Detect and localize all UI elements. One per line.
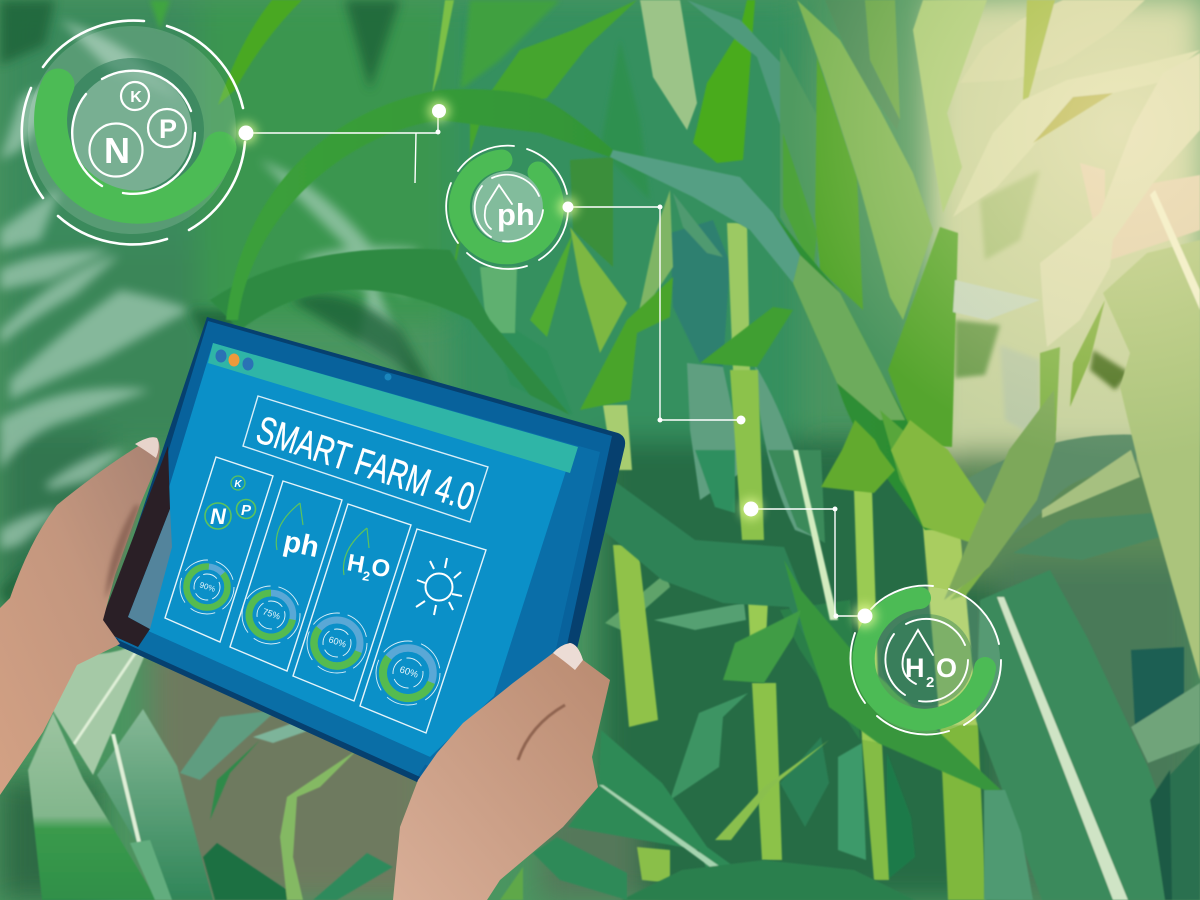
callout: H2O sensor: 2 <box>926 674 934 691</box>
screen <box>128 343 572 757</box>
panel: NPK: P <box>241 502 252 519</box>
leaf: lower right large leaf <box>976 570 1200 900</box>
green arc <box>459 160 553 254</box>
panel: NPK: K <box>234 479 242 490</box>
panel: H2O <box>293 504 411 701</box>
title box <box>243 396 488 522</box>
leaf: H2O lower leaf <box>603 450 1001 792</box>
camera <box>384 374 392 380</box>
leaves: middle background <box>480 0 1160 880</box>
stems: corn stalks <box>603 223 986 900</box>
gauge: 60%: 60% <box>398 664 420 681</box>
callout: NPK sensor <box>22 21 245 244</box>
callout: NPK sensor: N <box>104 130 130 171</box>
gauge: 90% <box>178 558 236 616</box>
tablet body <box>103 317 625 835</box>
gauge: 60% <box>375 640 441 706</box>
leaves: lower left corn <box>28 646 213 900</box>
header bar <box>208 343 578 473</box>
left hand <box>0 437 160 795</box>
tablet <box>102 317 625 835</box>
panel: pH: ph <box>281 526 322 564</box>
callout: NPK sensor: K <box>130 89 142 106</box>
callout: NPK sensor: P <box>159 114 177 144</box>
bezel <box>112 321 612 826</box>
gauge: 60%: 60% <box>327 634 348 649</box>
element badges <box>90 82 186 176</box>
callout: pH sensor <box>446 146 568 269</box>
green arc <box>51 85 220 207</box>
screen dark right region <box>128 343 600 810</box>
panel: H2O: O <box>369 554 392 583</box>
translucent disc <box>28 26 236 234</box>
inner ring <box>72 71 195 194</box>
panel: NPK: N <box>210 504 227 529</box>
outer ring <box>22 21 245 244</box>
green arc <box>864 598 985 720</box>
callout: H2O sensor <box>850 586 1001 735</box>
callout: pH sensor: ph <box>497 197 535 232</box>
panel: H2O: H <box>345 549 367 579</box>
connector: NPK to leaf node <box>235 100 450 183</box>
bottom bezel band <box>118 622 430 776</box>
gauge: 75% <box>242 586 300 644</box>
leaf: main arching leaf <box>226 89 988 530</box>
leaves: upper middle and right <box>210 0 1200 680</box>
leaves: lower center <box>568 730 915 900</box>
gauge: 90%: 90% <box>198 580 216 594</box>
title box: SMART FARM 4.0 <box>251 409 479 519</box>
reflection dark strip <box>102 446 170 647</box>
right hand <box>393 643 610 900</box>
gauge: 75%: 75% <box>261 606 282 621</box>
icon: sun <box>416 558 462 615</box>
panel: pH <box>230 481 342 671</box>
leaves: soil area left of right hand <box>180 710 627 900</box>
panel: H2O: 2 <box>361 568 371 584</box>
leaf: upper green <box>450 0 637 293</box>
connector: pH to stem node <box>558 197 746 424</box>
callout: H2O sensor: H <box>905 653 924 683</box>
reflection light <box>128 509 172 629</box>
panel: sunlight <box>360 529 486 733</box>
leaves: bud and sheath <box>821 390 1056 600</box>
connector: H2O to stem node <box>740 498 877 628</box>
panel: NPK <box>165 457 273 642</box>
window dots <box>216 350 254 370</box>
callout: H2O sensor: O <box>936 653 957 683</box>
gauge: 60% <box>307 613 367 673</box>
